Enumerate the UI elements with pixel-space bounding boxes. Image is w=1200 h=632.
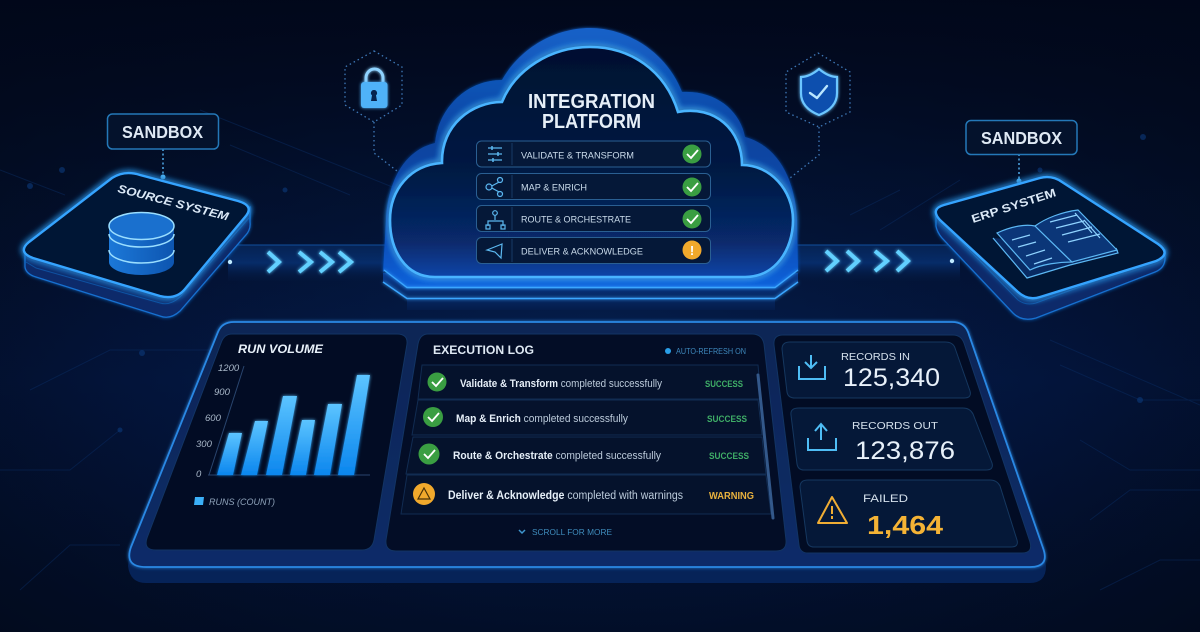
panel: source system platform bbox=[24, 173, 250, 317]
chart: y-axis labels: 1200 bbox=[218, 363, 240, 374]
heading: integration platform bbox=[528, 91, 655, 133]
panel: dashboard base bbox=[128, 322, 1046, 583]
label: sandbox left bbox=[108, 114, 218, 180]
panel: execution log bbox=[386, 334, 786, 551]
chart: y-axis labels: 300 bbox=[196, 439, 213, 450]
legend: runs count: RUNS (COUNT) bbox=[209, 497, 275, 507]
card: records out bbox=[791, 408, 992, 470]
log row: validate and transform: SUCCESS bbox=[705, 379, 743, 390]
panel: run volume chart bbox=[146, 334, 407, 550]
log row: map and enrich bbox=[412, 400, 762, 435]
chart: y-axis labels: 900 bbox=[214, 387, 231, 398]
log row: route and orchestrate: SUCCESS bbox=[709, 451, 749, 462]
scrollbar bbox=[758, 375, 773, 518]
label: sandbox left: SANDBOX bbox=[122, 122, 203, 142]
log row: route and orchestrate: Route & Orchestrate completed successfully bbox=[453, 450, 661, 462]
log row: route and orchestrate bbox=[406, 437, 766, 474]
card: records out: 123,876 bbox=[855, 437, 955, 465]
card: records out: RECORDS OUT bbox=[852, 420, 939, 432]
arrow: platform to ERP flow bbox=[790, 245, 962, 281]
row: deliver and acknowledge bbox=[476, 238, 710, 264]
row: validate and transform bbox=[476, 141, 710, 167]
card: failed: 1,464 bbox=[867, 510, 944, 540]
status: auto refresh: AUTO-REFRESH ON bbox=[676, 347, 746, 356]
label: sandbox right bbox=[966, 120, 1077, 184]
card: records in bbox=[782, 342, 970, 398]
card: failed bbox=[800, 480, 1017, 547]
panel: integration platform cloud bbox=[383, 28, 798, 310]
heading: execution log: EXECUTION LOG bbox=[433, 343, 534, 357]
log row: deliver and acknowledge: WARNING bbox=[709, 491, 754, 502]
row: deliver and acknowledge: DELIVER & ACKNOWLEDGE bbox=[521, 246, 643, 258]
panel: ERP system platform bbox=[936, 177, 1165, 319]
row: validate and transform: VALIDATE & TRANSFORM bbox=[521, 150, 634, 162]
label: sandbox right: SANDBOX bbox=[981, 128, 1062, 148]
log row: map and enrich: Map & Enrich completed successfully bbox=[456, 413, 628, 425]
row: route and orchestrate: ROUTE & ORCHESTRATE bbox=[521, 214, 631, 226]
icon: lock in dotted hexagon bbox=[345, 51, 402, 171]
log row: deliver and acknowledge: Deliver & Acknowledge completed with warnings bbox=[448, 490, 683, 502]
row: deliver and acknowledge: ! bbox=[690, 243, 694, 258]
heading: integration platform: PLATFORM bbox=[542, 111, 641, 133]
row: route and orchestrate bbox=[476, 206, 710, 232]
text: scroll for more: SCROLL FOR MORE bbox=[532, 528, 612, 537]
text: ERP system label: ERP SYSTEM bbox=[970, 187, 1058, 226]
panel: records stats bbox=[774, 335, 1031, 553]
row: map and enrich bbox=[476, 174, 710, 200]
row: map and enrich: MAP & ENRICH bbox=[521, 182, 587, 194]
card: records in: 125,340 bbox=[843, 364, 940, 392]
chart: y-axis labels: 0 bbox=[196, 469, 202, 480]
icon: shield in dotted hexagon bbox=[786, 53, 850, 178]
heading: run volume: RUN VOLUME bbox=[238, 342, 324, 356]
icon: open book bbox=[993, 210, 1118, 278]
icon: database bbox=[109, 212, 174, 275]
text: source system label: SOURCE SYSTEM bbox=[116, 183, 230, 224]
log row: deliver and acknowledge bbox=[401, 475, 771, 514]
card: failed: FAILED bbox=[863, 493, 908, 505]
chart: y-axis labels bbox=[196, 363, 240, 480]
log row: map and enrich: SUCCESS bbox=[707, 414, 747, 425]
card: records in: RECORDS IN bbox=[841, 351, 910, 363]
chart: y-axis labels: 600 bbox=[205, 413, 222, 424]
log row: validate and transform bbox=[418, 365, 761, 399]
arrow: source to platform flow bbox=[222, 245, 393, 281]
chart: bars bbox=[217, 375, 370, 475]
log row: validate and transform: Validate & Transform completed successfully bbox=[460, 378, 662, 390]
heading: integration platform: INTEGRATION bbox=[528, 91, 655, 113]
